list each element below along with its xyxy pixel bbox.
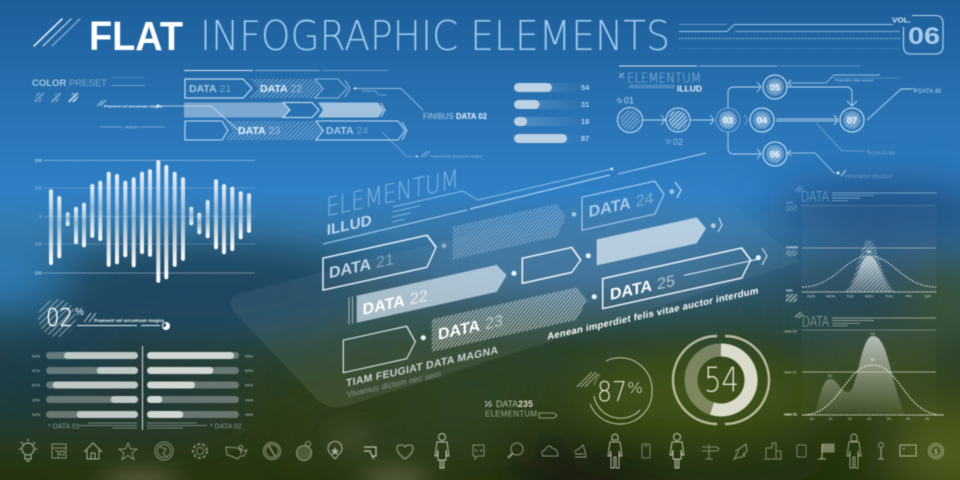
arrow DATA 21: DATA 21 [189,83,231,95]
flow labels: Praesdive vitae laoreet [835,78,875,82]
VOL label: VOL. [892,16,911,24]
arrow DATA 22: DATA 22 [260,83,302,95]
box DATA 25: DATA 25 [610,272,675,304]
filled block right [597,215,706,265]
bottom area chart [784,312,944,421]
node 01: 01 [624,96,634,106]
top process arrows [97,70,488,158]
axis labels: SUN [807,294,815,298]
caption right: Aenean imperdiet felis vitae auctor interdum [547,285,758,343]
arrow DATA 23: DATA 23 [238,125,280,137]
preset label: COLOR PRESET [32,78,107,89]
connectors [643,75,912,174]
right bars: 24% [245,398,253,402]
target label [100,126,165,130]
hatched bell [845,240,895,292]
percent symbol: % [627,379,643,397]
axis labels: 03 [867,417,871,421]
callout label finibus: FINIBUS DATA 02 [423,112,488,121]
callout praesent left: Praesent vel accumsan magna [104,104,163,108]
chart heading [795,312,936,331]
legends: * DATA 01 [48,424,80,430]
node 03 [716,108,740,132]
box DATA 24: DATA 24 [589,189,654,221]
top area chart [786,186,937,302]
icon: globe circle [155,442,173,460]
filled bar row [184,102,385,118]
donut value arc [712,350,751,410]
wave bar chart [34,158,255,283]
horizontal values bars [514,83,590,143]
icon: shop [52,444,66,458]
axis labels: MON [826,294,835,298]
axis labels: THU [885,294,893,298]
filled box DATA 22 [349,263,507,324]
arrow DATA 24 [316,121,407,140]
axis labels: data 01 [784,412,797,416]
hatched block top [453,202,566,260]
double bar comparison [32,346,253,430]
box DATA 25 [603,245,757,309]
axis labels: 81 [871,332,875,336]
bar 18: 18 [581,117,589,126]
icon: gear [193,444,207,458]
title bold word: FLAT [89,13,183,59]
flow labels [835,78,942,180]
axis labels: 57 [871,358,875,362]
legends [48,423,242,430]
wave chart axis labels: 100 [34,242,42,246]
node 03: 03 [723,116,733,126]
axis labels: middle [786,246,798,250]
empty box middle [522,245,581,283]
wave chart axis labels: 0 [39,214,42,219]
wave bars [49,160,251,283]
flow heading [619,72,702,94]
axis labels: 05 [906,417,910,421]
icon: cloud [542,446,558,456]
title light words: INFOGRAPHIC ELEMENTS [200,12,670,60]
icon: tablet [797,445,806,457]
data 235 label: ELEMENTUM [485,410,537,419]
translucent tilted panel [231,175,800,407]
dotted curve [802,365,943,415]
icon: usa map [226,445,247,459]
header circuit lines [679,24,900,48]
icon: laptop [900,445,916,456]
axis labels: 01 [848,417,852,421]
node 01 [617,96,642,132]
percent sign: % [75,307,84,318]
wave chart axis labels: 100 [34,186,42,190]
87 percent gauge [577,358,652,424]
left bars: 32% [32,398,40,402]
icon: globe pin [296,442,312,460]
node 02 [666,108,690,147]
axis labels: 89 [867,250,871,254]
axis labels: SAT [924,294,932,298]
left bars: 81% [32,382,40,388]
icon: woman figure two [670,434,684,468]
node 06 [763,142,787,166]
axis labels: WED [865,294,874,298]
axis labels: data 03 [784,330,797,334]
box DATA 24 [582,179,664,230]
swatches [786,205,797,302]
axis labels [784,330,929,421]
node 07: 07 [847,116,857,126]
right bars: 54% [245,382,253,388]
callout praesent left [97,100,238,130]
left bars: 64% [32,354,40,358]
axis labels [786,200,932,298]
icon: man figure [608,434,622,468]
icon row [19,434,944,468]
badge caption: Praesent vel accumsan magna [94,318,164,324]
connector dots and chevrons [421,182,767,340]
left bars: 54% [32,412,40,417]
preset swatches [33,93,80,102]
icon: star [119,443,137,460]
flow labels: DATA 46 [918,89,942,95]
arrow DATA 22 [250,79,324,98]
donut track [691,350,751,410]
coin dollar glyph: $ [934,449,938,456]
right bars [147,352,253,418]
icon: flag [818,444,834,459]
axis labels: data 02 [784,370,797,374]
icon: rocket [733,444,747,460]
arrow DATA 24: DATA 24 [326,125,368,137]
big 02: 02 [46,303,73,332]
axis labels: 00 [810,417,814,421]
bar 87: 87 [581,134,589,143]
color preset [32,78,145,102]
node 07 [840,108,864,132]
icon: castle buildings [764,443,782,459]
left bars: 61% [32,368,40,373]
data 235 label: DATA235 [496,399,533,409]
central heading [326,164,459,239]
box DATA 21 [323,233,436,290]
icon: badge pin [328,441,342,459]
callout praesent right [382,132,483,158]
badge mini pie [162,322,170,330]
volume badge [892,16,943,54]
node 05: 05 [770,82,781,94]
central heading: ILLUD [327,212,372,239]
54 donut gauge [673,336,769,424]
empty box bottom [343,324,415,373]
legends: * DATA 02 [210,424,242,430]
bar 54: 54 [581,83,590,92]
node 04 [750,108,774,132]
axis labels: 01 [829,417,833,421]
caption left: TIAM FEUGIAT DATA MAGNA [346,344,498,390]
chart heading [795,186,937,206]
icon: map pin post [878,442,884,459]
caption left: Vivamus dictum nec sem [347,369,441,399]
wave chart axis labels: 100 [34,158,42,163]
flow chart [617,66,942,180]
decorative central lines [323,153,706,244]
icon: heart [397,445,413,459]
axis labels: 06 [925,417,929,421]
chart heading: DATA [802,315,830,331]
right bars: 94% [245,354,253,358]
filled hills [815,336,905,415]
icon: woman figure [435,434,449,468]
arrow DATA 23 [226,121,325,140]
left bars [32,352,138,418]
chart heading: DATA [801,190,830,206]
hatched box DATA 23: DATA 23 [438,312,503,344]
data 235 label [485,399,557,419]
icon: signpost [702,444,719,459]
flow heading: ILLUD [677,84,702,94]
right bars: 84% [245,368,253,373]
callout praesent right: Praesent vel accumsan magna [430,154,483,158]
flow labels: PRAESENT FEUGIAT [845,174,893,180]
wave chart axis labels: 100 [34,270,42,276]
06 number: 06 [908,23,940,50]
icon: magnifier [508,443,523,458]
87 number: 87 [597,375,627,408]
flow labels: DATA 45 [872,151,896,157]
wave chart grid [44,160,255,273]
icon: chat [473,445,484,459]
wave chart axis labels [34,158,42,276]
target label: TARGET [124,126,140,130]
title [34,12,670,60]
axis labels: FRI [906,294,912,298]
02 percent badge [38,299,170,337]
icon: phone [642,444,650,458]
node 05 [763,75,787,99]
right bars: 44% [245,412,253,417]
donut number: 54 [704,360,739,400]
central skewed diagram [323,99,758,405]
axis labels: min [786,288,793,292]
filled box DATA 22: DATA 22 [363,287,428,319]
central heading: ELEMENTUM [326,164,459,223]
outer ring [673,336,769,424]
dotted curve [802,256,936,287]
icon: compass [264,442,280,460]
arrow DATA 21 [185,79,252,98]
bar 31: 31 [581,100,589,109]
axis labels: 04 [887,417,891,421]
icon: coin [928,444,944,458]
node 06: 06 [770,150,780,160]
node 04: 04 [757,116,768,126]
solid bell [848,256,892,292]
axis labels: 63 [828,374,832,378]
axis labels: max [786,200,793,204]
icon: hand [364,447,376,459]
node 02: 02 [673,137,683,147]
flow heading: ELEMENTUM [627,72,701,86]
axis labels: TUE [846,294,854,298]
icon: hand pointing [574,445,586,457]
callout line finibus [354,87,423,110]
box DATA 21: DATA 21 [329,250,394,282]
icon: house [84,443,102,459]
hatched box DATA 23 [432,285,587,352]
title stripes icon [34,19,80,46]
icon: man figure two [847,434,861,468]
icon: light bulb [19,439,37,461]
